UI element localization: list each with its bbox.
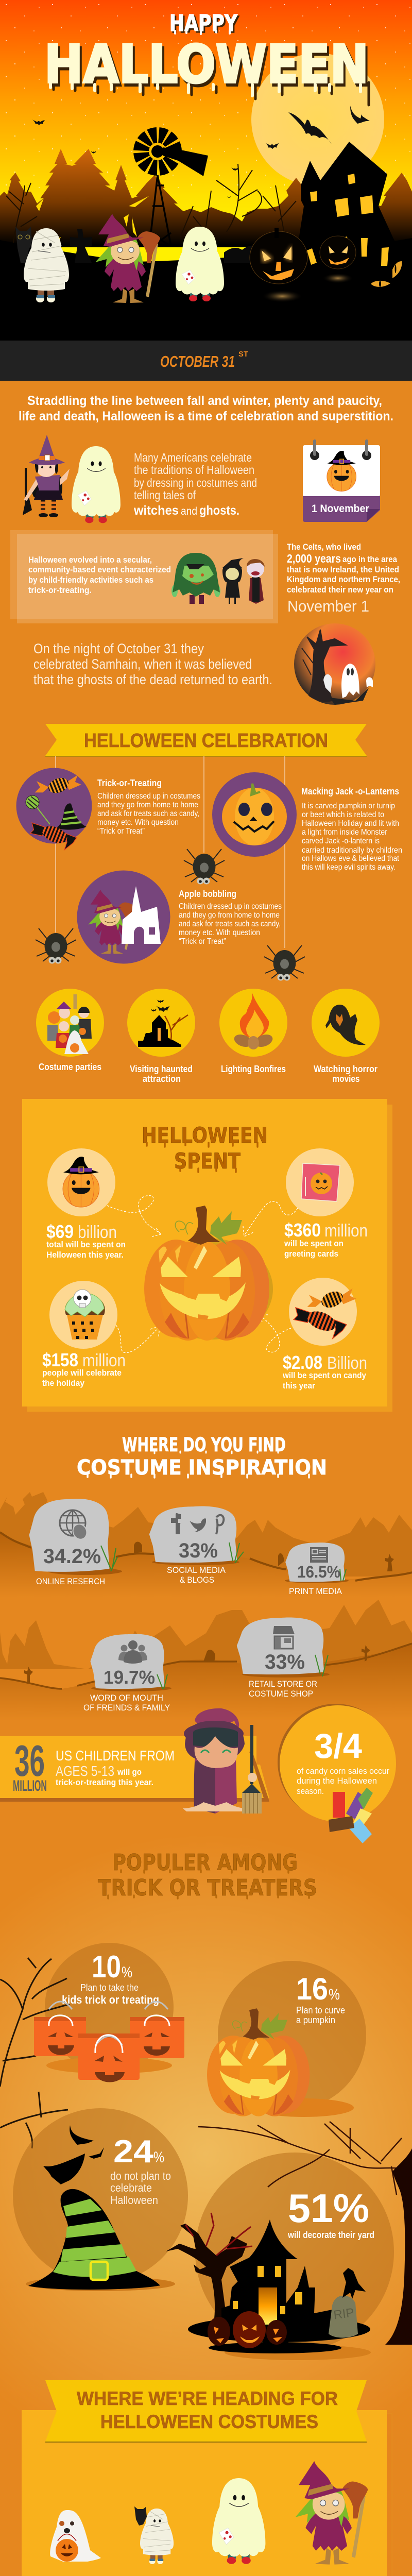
panel text: by child-friendly activities such as: [28, 575, 153, 585]
icon: ghost circle: [294, 623, 375, 705]
text: the celts: celebrated their new year on: [287, 585, 393, 595]
icon: witch: [295, 2461, 368, 2565]
panel text: community-based event characterized: [28, 565, 171, 574]
stat: 360 million: $360: [284, 1219, 321, 1241]
heading: where do you find costume inspiration: WHERE DO YOU FIND: [122, 1434, 286, 1456]
value: [113, 2134, 164, 2170]
text: the celts: [287, 542, 400, 615]
tombstone: social media: [149, 1506, 244, 1585]
text: jack-o-lanterns: Macking Jack -o-Lanterns: [301, 786, 399, 796]
costume: dog ghost ebay: [39, 2510, 101, 2576]
apple bobbling item: [77, 871, 282, 963]
haunted house: [288, 142, 397, 266]
value: %: [122, 1964, 132, 1981]
text: jack-o-lanterns: a light from inside Monster: [302, 828, 387, 837]
icon: witch girl: [23, 435, 70, 517]
stat: 69 billion: Helloween this year.: [46, 1250, 124, 1260]
caption: do not plan to: [110, 2170, 171, 2182]
icon: branches and big tree: [198, 2122, 412, 2345]
heading: helloween spent: [142, 1123, 268, 1174]
label: ONLINE RESERCH: [36, 1577, 105, 1586]
label: [167, 1565, 226, 1585]
text: apple bobbling: [179, 889, 282, 946]
text: trick-or-treating: and ask for treats such as candy,: [97, 809, 199, 818]
icon: vampire: [247, 559, 265, 604]
stat: 24 percent: [13, 2108, 188, 2291]
text: samhain: celebrated Samhain, when it was believed: [33, 656, 252, 672]
tombstone: word of mouth: [83, 1634, 171, 1713]
stat: 158 million: people will celebrate: [42, 1368, 122, 1378]
text: us children: [56, 1748, 175, 1787]
heading: happy: HAPPY: [169, 10, 238, 37]
ground shadow: [225, 2345, 371, 2360]
panel text: Halloween evolved into a secular,: [28, 555, 152, 565]
icon: people: [118, 1640, 147, 1664]
icon: candy bars: [329, 1788, 373, 1843]
banner: helloween celebration: [45, 724, 367, 757]
bare trees: [6, 164, 296, 247]
stat: 158 million: $158: [42, 1349, 78, 1370]
icon: spider left: [36, 928, 76, 963]
text: trick-or-treating: “Trick or Treat”: [97, 827, 145, 836]
label: attraction: [143, 1074, 181, 1084]
label: [130, 1064, 193, 1084]
icon: kids group: [47, 994, 92, 1054]
jack-o-lanterns item: [212, 772, 402, 872]
text: the celts: The Celts, who lived: [287, 542, 361, 552]
intro heading: [19, 394, 393, 423]
text: many americans: witches: [133, 503, 179, 518]
title: happy halloween: [44, 10, 371, 105]
black ground: [0, 238, 412, 341]
label: OF FREINDS & FAMILY: [83, 1703, 170, 1713]
yard pumpkins: [208, 2311, 287, 2348]
text: many americans: by dressing in costumes and: [134, 476, 257, 489]
text: trick-or-treating: and they go from home to home: [97, 801, 198, 809]
text: jack-o-lanterns: or beet which is related to: [302, 810, 384, 819]
text: apple bobbling: and they go from home to home: [179, 911, 280, 920]
stat: 158 million: [42, 1281, 126, 1388]
stat: 360 million: will be spent on: [284, 1239, 344, 1248]
text: jack-o-lanterns: on Hallows eve & believed that: [302, 854, 400, 863]
value: 10: [92, 1950, 121, 1984]
stat: 360 million: greeting cards: [284, 1249, 338, 1259]
panel: secular community: [10, 530, 278, 623]
windmill: [141, 135, 208, 246]
icon: haunted silhouette: [138, 999, 188, 1047]
value: 16.5%: [297, 1563, 340, 1581]
text: us children: trick-or-treating this year.: [56, 1777, 153, 1787]
stat: 69 billion: $69: [46, 1221, 74, 1242]
text: trick-or-treating: Children dressed up in costumes: [97, 792, 200, 801]
label: PRINT MEDIA: [289, 1586, 342, 1596]
tree line silhouette: [0, 149, 412, 247]
heading: where do you find costume inspiration: COSTUME INSPIRATION: [77, 1456, 327, 1480]
text: samhain: that the ghosts of the dead returned to earth.: [33, 672, 272, 687]
caption: a pumpkin: [296, 2015, 335, 2025]
cat eyes: [371, 261, 402, 287]
icon: purple candy circle: [16, 768, 92, 850]
heading: where do you find costume inspiration: [77, 1434, 327, 1480]
text: jack-o-lanterns: carried traditionally by children: [302, 846, 402, 855]
stat: 2.08 billion: $2.08: [283, 1352, 322, 1373]
caption: celebrate: [110, 2181, 152, 2194]
crow: [342, 2268, 366, 2299]
icon: greeting card: [301, 1163, 340, 1201]
character: mummy: [24, 228, 69, 302]
text: us children: US CHILDREN FROM: [56, 1748, 175, 1764]
text: trick-or-treating: money etc. With question: [97, 818, 179, 827]
icon: bats: [43, 2125, 104, 2184]
icon: trick-or-treat bags: [34, 2002, 184, 2082]
text: jack-o-lanterns: Halloween Holiday and lit with: [302, 819, 399, 828]
caption: [296, 2005, 345, 2025]
label: WORD OF MOUTH: [90, 1693, 163, 1703]
number: 36: 36: [14, 1737, 45, 1786]
date text: OCTOBER 31: [160, 352, 235, 370]
black cat behind mummy: [15, 227, 32, 263]
value: 51%: [288, 2185, 369, 2231]
dashed arrows to pumpkin: [107, 1196, 298, 1353]
text: apple bobbling: Children dressed up in costumes: [179, 902, 282, 911]
icon: witch with broom: [183, 1708, 262, 1814]
label: COSTUME SHOP: [249, 1689, 313, 1699]
caption: [110, 2170, 171, 2207]
tombstone: print media: [285, 1543, 349, 1596]
text: apple bobbling: “Trick or Treat”: [179, 937, 226, 946]
label: SOCIAL MEDIA: [167, 1565, 226, 1575]
icon: green monster: [171, 553, 220, 604]
value: 33%: [265, 1651, 305, 1673]
label: [249, 1679, 317, 1699]
heading: populer among trick or treaters: TRICK OR TREATERS: [98, 1875, 317, 1901]
glowing pumpkin small: [320, 236, 356, 283]
icon: bonfire: [232, 993, 274, 1049]
stat: 158 million: the holiday: [42, 1379, 85, 1388]
value: 3/4: [314, 1726, 362, 1766]
icon: pinterest p: [216, 1515, 224, 1534]
costume: witch supermarket: [287, 2461, 376, 2576]
label: [83, 1693, 170, 1713]
caption: of candy corn sales occur: [297, 1766, 389, 1776]
heading: helloween spent: SPENT: [174, 1148, 241, 1174]
text: many americans: Many Americans celebrate: [134, 451, 252, 464]
caption: [297, 1766, 389, 1796]
icon: globe and mouse: [60, 1510, 89, 1541]
panel text: [28, 555, 171, 595]
label: Lighting Bonfires: [221, 1064, 286, 1074]
pumpkin shadow: [254, 2098, 354, 2117]
text: apple bobbling: and ask for treats such as candy,: [179, 920, 281, 928]
stat: 360 million: [284, 1148, 368, 1259]
text: trick-or-treating: Trick-or-Treating: [97, 778, 162, 788]
value: 34.2%: [43, 1545, 101, 1568]
text: the celts: that is now Ireland, the United: [287, 565, 399, 574]
panel text: trick-or-treating.: [28, 585, 92, 595]
heading: populer among trick or treaters: POPULER AMONG: [112, 1850, 298, 1876]
character: witch: [95, 214, 160, 303]
label: RETAIL STORE OR: [249, 1679, 317, 1689]
glowing pumpkin large: [250, 228, 307, 302]
text: apple bobbling: Apple bobbling: [179, 889, 236, 899]
caption: Halloween: [110, 2194, 158, 2207]
stat: 2.08 billion: will be spent on candy: [282, 1371, 367, 1380]
heading: happy: HAPPY: [171, 12, 239, 38]
value: %: [153, 2149, 164, 2166]
heading: halloween: HALLOWEEN: [44, 34, 369, 95]
activity: lighting bonfires: [219, 989, 287, 1074]
rip headstone: [329, 2296, 358, 2338]
calendar date: 1 November: [312, 503, 369, 515]
value: %: [329, 1986, 340, 2003]
value: 24: [113, 2134, 154, 2170]
panel: helloween spent: [22, 1099, 392, 1412]
unit: million: MILLION: [13, 1777, 47, 1794]
icon: spider middle: [184, 849, 225, 884]
stat: 69 billion: total will be spent on: [46, 1240, 126, 1249]
label: movies: [333, 1074, 359, 1084]
label: [314, 1064, 377, 1084]
icon: skull cupcake: [65, 1290, 105, 1340]
stat: 158 million: million: [82, 1351, 126, 1370]
icon: facebook f: [171, 1513, 181, 1534]
icon: tree left: [0, 1958, 70, 2148]
spider threads: [56, 756, 285, 948]
icon: shop: [273, 1626, 295, 1649]
stat: 16 percent: [207, 1961, 366, 2117]
banner: where we're heading: HELLOWEEN COSTUMES: [100, 2411, 318, 2432]
rip headstone: RIP: [333, 2306, 355, 2323]
text: jack-o-lanterns: carved Jack -o-lantern is: [302, 837, 380, 845]
bats in the sky: [32, 106, 370, 198]
icon: dog ghost: [50, 2510, 101, 2562]
text: samhain: [33, 641, 272, 687]
stat: 2.08 billion: this year: [283, 1381, 316, 1391]
icon: striped witch hat: [28, 2189, 160, 2290]
hat shadow: [26, 2277, 175, 2291]
value: 19.7%: [104, 1667, 155, 1688]
intro heading: Straddling the line between fall and winter, plenty and paucity,: [27, 394, 382, 408]
text: jack-o-lanterns: this will keep evil spirits away.: [302, 863, 396, 872]
graveyard landscape 2: [0, 1600, 412, 1721]
text: many americans: and: [181, 505, 197, 517]
icon: purple pumpkin circle: [212, 772, 297, 857]
text: many americans: the traditions of Halloween: [134, 463, 254, 477]
icon: jack-o-lantern: [207, 2008, 310, 2116]
label: Costume parties: [39, 1062, 101, 1072]
bag shadow: [46, 2057, 172, 2074]
trick-or-treating item: [16, 768, 200, 850]
text: trick-or-treating: [97, 778, 200, 836]
stat: 69 billion: [46, 1148, 126, 1260]
icon: mummy: [140, 2509, 174, 2564]
stat: 2.08 billion: Billion: [327, 1353, 367, 1373]
icon: ghost: [72, 446, 121, 523]
icon: cat behind mummy: [134, 2506, 147, 2526]
label: Watching horror: [314, 1064, 377, 1074]
tombstone: online research: [29, 1499, 122, 1586]
text: the celts: ago in the area: [342, 554, 397, 564]
stat: 360 million: million: [324, 1221, 368, 1241]
text: jack-o-lanterns: It is carved pumpkin or turnip: [302, 802, 395, 810]
text: many americans: [133, 451, 257, 518]
costume: mummy aldi: [123, 2506, 185, 2576]
activity: costume parties: [36, 989, 104, 1072]
text: the celts: 2,000 years: [287, 552, 341, 565]
caption: season.: [297, 1786, 324, 1796]
icon: ghost: [212, 2478, 265, 2564]
text: jack-o-lanterns: [301, 786, 402, 872]
text: the celts: November 1: [287, 597, 369, 615]
stat: 2.08 billion: [282, 1278, 367, 1391]
moon: [251, 53, 384, 186]
icon: twitter bird: [190, 1518, 206, 1532]
panel: hero illustration: [0, 0, 412, 341]
label: Visiting haunted: [130, 1064, 193, 1074]
activity: haunted attraction: [127, 989, 195, 1084]
text: the celts: Kingdom and northern France,: [287, 574, 400, 584]
intro heading: life and death, Halloween is a time of celebration and superstition.: [19, 409, 393, 423]
value: 16: [296, 1972, 328, 2006]
icon: haunted house yard: [166, 2213, 370, 2353]
text: many americans: telling tales of: [134, 488, 196, 502]
text: many americans: ghosts.: [199, 503, 239, 518]
panel: costumes: [22, 2410, 392, 2576]
icon: dark ghost: [325, 1005, 366, 1045]
character: ghost: [176, 227, 224, 301]
caption: during the Halloween: [297, 1776, 377, 1786]
text: us children: will go: [117, 1767, 142, 1777]
caption: will decorate their yard: [287, 2230, 374, 2240]
icon: calendar 1 november: [303, 439, 380, 522]
text: apple bobbling: money etc. With question: [179, 928, 260, 937]
value: 33%: [179, 1539, 218, 1562]
text: us children: AGES 5-13: [56, 1763, 114, 1779]
icon: spider right: [264, 945, 305, 981]
caption: [62, 1982, 159, 2006]
icon: small witch: [222, 558, 244, 604]
icon: newspaper: [310, 1547, 328, 1563]
banner: where we're heading: WHERE WE’RE HEADING FOR: [77, 2388, 338, 2409]
caption: Plan to curve: [296, 2005, 345, 2015]
banner: helloween celebration: HELLOWEEN CELEBRATION: [84, 730, 328, 752]
caption: Plan to take the: [80, 1982, 139, 1993]
stat: 3/4 candy corn: [278, 1704, 396, 1822]
panel: 36 million children: [0, 1736, 269, 1802]
text: samhain: On the night of October 31 they: [33, 641, 204, 656]
tombstone: retail store: [237, 1618, 330, 1699]
heading: populer among trick or treaters: [98, 1850, 317, 1901]
date bar: [0, 341, 412, 381]
graveyard landscape 1: [0, 1492, 412, 1597]
banner: where we're heading: [45, 2380, 367, 2443]
gravestones: [70, 229, 260, 263]
icon: witch and house circle: [77, 871, 170, 963]
date suffix: ST: [238, 350, 248, 359]
heading: halloween: HALLOWEEN: [46, 37, 371, 98]
heading: helloween spent: HELLOWEEN: [142, 1123, 268, 1148]
activity: horror movies: [312, 989, 380, 1084]
stat: 10 percent: [0, 1943, 184, 2148]
big jack-o-lantern: [144, 1206, 273, 1341]
radial light behind stats: [0, 1834, 412, 2478]
stat: 51 percent: [166, 2122, 412, 2360]
costume: ghost amazon: [209, 2478, 270, 2576]
label: & BLOGS: [180, 1575, 214, 1585]
caption: kids trick or treating: [62, 1993, 159, 2006]
stat: 69 billion: billion: [78, 1223, 117, 1242]
